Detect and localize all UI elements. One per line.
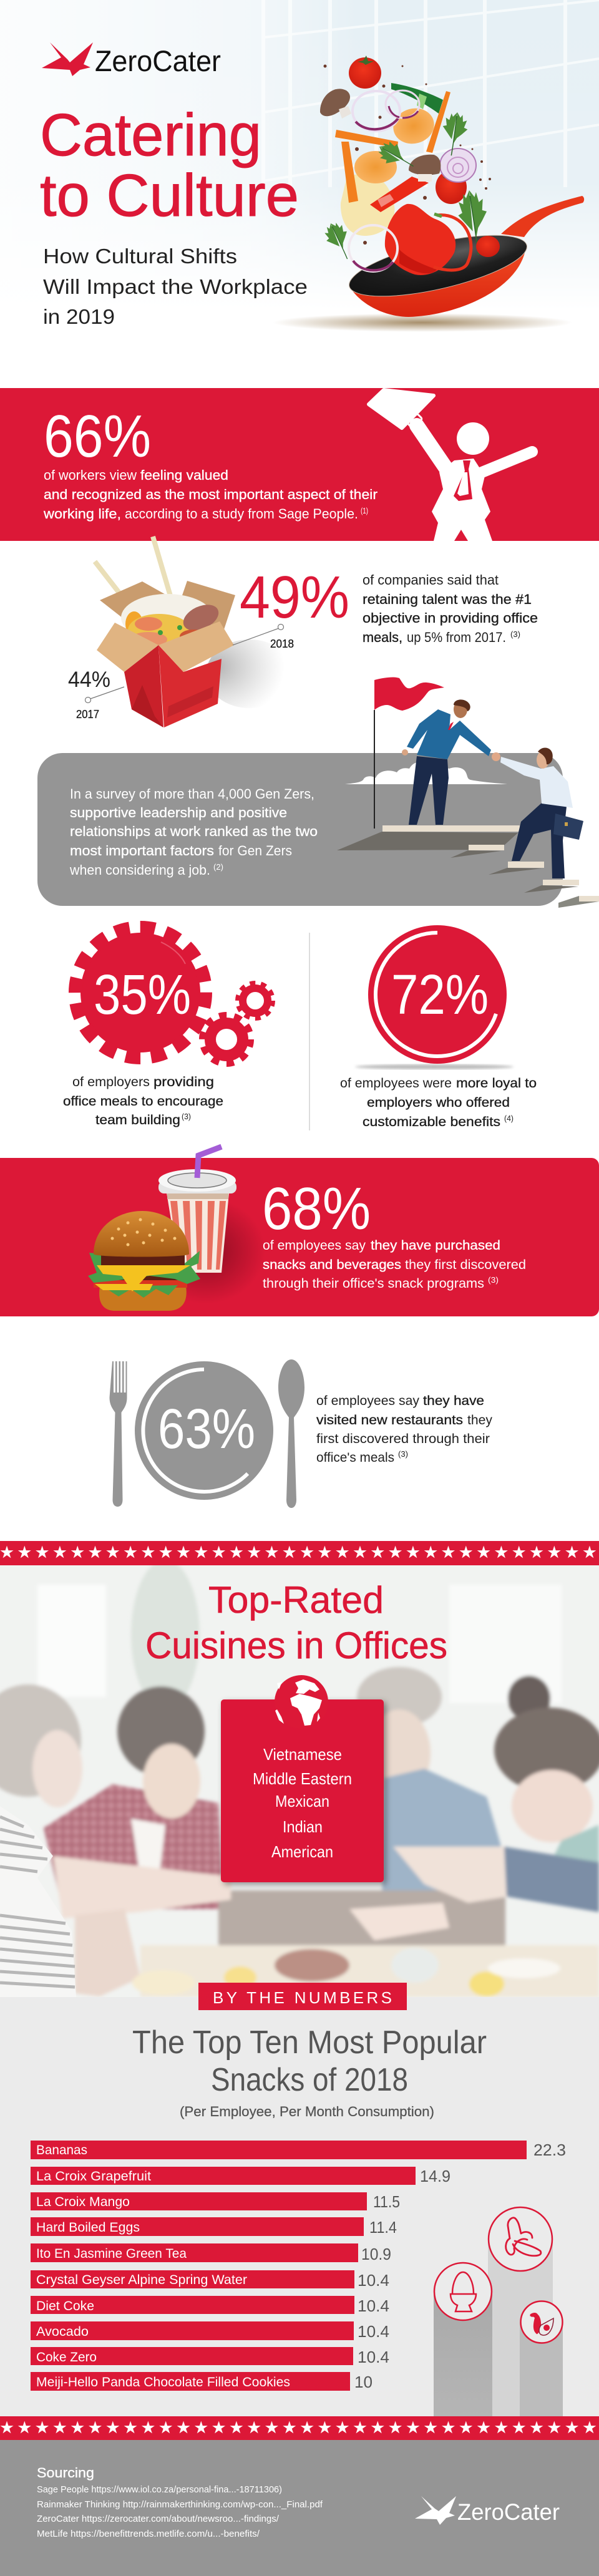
heading: Top-Rated Cuisines — [145, 1579, 447, 1666]
text block — [69, 786, 318, 878]
panel: 66% red banner — [0, 388, 599, 541]
bar: Avocado — [31, 2321, 389, 2341]
text block: retaining talent: objective in providing office — [363, 610, 538, 626]
bar: Diet Coke — [31, 2296, 389, 2315]
text block: new restaurants: (3) — [398, 1449, 408, 1459]
bar: La Croix Grapefruit — [31, 2167, 450, 2185]
text block: new restaurants: of employees say — [316, 1394, 419, 1408]
small gear — [202, 1015, 251, 1064]
bar: Avocado: Avocado — [36, 2325, 89, 2339]
text block: new restaurants: they have — [423, 1394, 484, 1408]
cuisine list: Indian — [283, 1817, 323, 1836]
icon: origami crane — [42, 42, 93, 76]
title: Catering — [40, 102, 261, 168]
text block: (2) — [213, 862, 223, 872]
icon: soda cup — [158, 1147, 236, 1273]
text block: customizable benefits: employers who offered — [367, 1096, 510, 1110]
text block — [43, 467, 377, 522]
panel: footer sourcing — [0, 2440, 599, 2576]
text block: through their office's snack programs — [263, 1276, 484, 1291]
stat: 68%: 68% — [262, 1175, 371, 1242]
cuisine list: Middle Eastern — [253, 1769, 352, 1788]
food — [125, 600, 223, 648]
peppercorns — [323, 65, 491, 245]
bar: Meiji-Hello Panda — [31, 2372, 373, 2391]
text block: when considering a job. — [69, 862, 210, 878]
text block: relationships at work ranked as the two — [70, 824, 318, 839]
bar: Meiji-Hello Panda: 10 — [354, 2373, 373, 2391]
bar: Coke Zero: 10.4 — [358, 2348, 389, 2366]
illustration: vegetables tossed from frying pan — [273, 56, 584, 332]
icon: banana — [489, 2207, 552, 2271]
icon: plate with fork and spoon, 63% — [110, 1359, 304, 1508]
stat: 49% with 2018 marker — [233, 564, 349, 650]
flag — [374, 678, 444, 711]
text block: snacks and beverages — [263, 1258, 401, 1272]
text block: customizable benefits: customizable benefits — [363, 1115, 500, 1129]
decorative columns with icons — [434, 2207, 563, 2416]
text block: (1) — [361, 506, 368, 515]
bar: La Croix Mango: La Croix Mango — [36, 2195, 130, 2209]
icon: avocado — [520, 2301, 563, 2343]
bar: Ito En Jasmine Green Tea: Ito En Jasmine Green Tea — [36, 2247, 187, 2261]
bar: Diet Coke: 10.4 — [358, 2297, 389, 2315]
bar: Bananas — [31, 2141, 566, 2159]
carrots and peppers — [391, 83, 443, 114]
fork — [110, 1361, 127, 1507]
pan handle — [501, 196, 584, 237]
text block: they have purchased — [371, 1238, 500, 1253]
text block: office meals team building — [63, 1075, 223, 1127]
cuisine list — [253, 1745, 352, 1861]
panel: snacks chart background — [0, 1997, 599, 2416]
bar: Coke Zero: Coke Zero — [36, 2350, 97, 2365]
cuisine list: Mexican — [275, 1792, 329, 1810]
bar: Avocado: 10.4 — [358, 2322, 389, 2341]
title — [40, 102, 299, 229]
man in white shirt with briefcase — [492, 748, 583, 878]
star band: upper — [0, 1541, 599, 1565]
bar: Hard Boiled Eggs: 11.4 — [369, 2218, 397, 2237]
tiny gear — [238, 983, 273, 1018]
illustration: handshake on stairs with flag — [337, 678, 599, 908]
text block: customizable benefits: of employees were — [340, 1076, 452, 1091]
bar: La Croix Mango — [31, 2192, 400, 2211]
tomatoes — [349, 57, 381, 89]
text block: office meals team building: providing — [153, 1075, 214, 1089]
title: to Culture — [40, 162, 299, 229]
panel: cuisines card — [221, 1675, 384, 1882]
background: blurred office windows — [0, 0, 599, 337]
text block: retaining talent: retaining talent was the #1 — [363, 591, 532, 607]
potato — [341, 174, 394, 236]
text block: office meals team building: office meals to encourage — [63, 1094, 223, 1109]
text block: new restaurants: they — [467, 1413, 492, 1427]
subtitle: in 2019 — [43, 305, 115, 328]
pan bowl — [351, 246, 526, 317]
icon: businessman with briefcase — [369, 390, 532, 541]
bar: Hard Boiled Eggs: Hard Boiled Eggs — [36, 2220, 140, 2235]
text block: office meals team building: team building — [95, 1113, 180, 1127]
subtitle — [43, 245, 308, 328]
stat: 44% with 2017 marker — [68, 668, 124, 721]
source list: Sage People https://www.iol.co.za/personal-fina...-18711306) — [37, 2484, 282, 2495]
text block: feeling valued — [140, 467, 228, 483]
text block: retaining talent: up 5% from 2017. — [407, 629, 506, 645]
panel: photo background of people dining — [0, 1560, 599, 1997]
bar: Ito En Jasmine Green Tea — [31, 2243, 391, 2263]
source list — [37, 2484, 323, 2539]
star band: lower — [0, 2416, 599, 2440]
subtitle: How Cultural Shifts — [43, 245, 237, 268]
text block: of employees say — [263, 1238, 366, 1253]
striped shirt — [0, 1806, 76, 1997]
bar: Bananas: 22.3 — [533, 2141, 566, 2159]
text block: of workers view — [44, 467, 137, 483]
text block: new restaurants — [316, 1394, 492, 1465]
source list: MetLife https://benefittrends.metlife.com/u...-benefits/ — [37, 2529, 260, 2539]
main gear — [75, 928, 205, 1057]
parsley sprigs — [439, 110, 470, 157]
stat: 49% with 2018 marker: 2018 — [270, 638, 294, 650]
text block: and recognized as the most important aspect of their — [44, 487, 377, 502]
plate — [135, 1361, 273, 1500]
logo: ZeroCater — [42, 42, 221, 77]
heading: top ten snacks: The Top Ten Most Popular — [132, 2024, 487, 2061]
bar: Diet Coke: Diet Coke — [36, 2299, 94, 2313]
badge: by the numbers: BY THE NUMBERS — [213, 1988, 392, 2007]
text block: customizable benefits: (4) — [504, 1114, 514, 1123]
text block: customizable benefits — [340, 1076, 537, 1129]
heading: top ten snacks: (Per Employee, Per Month Consumption) — [180, 2104, 434, 2119]
text block: new restaurants: first discovered through their — [316, 1432, 490, 1446]
stairs — [337, 825, 599, 908]
cloud — [345, 762, 507, 784]
stat: 66%: 66% — [44, 403, 151, 470]
stat: 35% gear graphic: 35% — [94, 964, 191, 1026]
onion rings and mushrooms — [320, 89, 350, 116]
icon: plate with fork and spoon, 63%: 63% — [158, 1398, 255, 1461]
subtitle: Will Impact the Workplace — [43, 275, 308, 298]
heading: Top-Rated Cuisines: Cuisines in Offices — [145, 1625, 447, 1666]
text block: new restaurants: visited new restaurants — [316, 1413, 463, 1427]
stat: 49% with 2018 marker: 49% — [240, 564, 349, 631]
bar: Bananas: Bananas — [36, 2143, 87, 2157]
icon: burger — [88, 1211, 200, 1311]
source list: ZeroCater https://zerocater.com/about/newsroo...-findings/ — [37, 2514, 280, 2524]
text block: new restaurants: office's meals — [316, 1451, 394, 1465]
text block: office meals team building: of employers — [72, 1075, 150, 1089]
bar: Meiji-Hello Panda: Meiji-Hello Panda Chocolate Filled Cookies — [36, 2375, 290, 2389]
text block: retaining talent: meals, — [363, 629, 402, 645]
text block: they first discovered — [405, 1258, 526, 1272]
illustration: takeout box — [95, 537, 293, 727]
heading: top ten snacks — [132, 2024, 487, 2119]
bar: La Croix Grapefruit: 14.9 — [420, 2167, 450, 2185]
bar: Hard Boiled Eggs — [31, 2217, 397, 2237]
panel: Gen Z gray card — [37, 753, 563, 906]
icon: egg in cup — [434, 2263, 492, 2320]
text block: In a survey of more than 4,000 Gen Zers, — [70, 786, 314, 802]
stat: 72% circle: 72% — [391, 964, 489, 1026]
text block: retaining talent: of companies said that — [363, 572, 499, 588]
stat: 44% with 2017 marker: 2017 — [76, 708, 99, 721]
bar: La Croix Mango: 11.5 — [373, 2192, 400, 2211]
stat: 72% circle — [355, 925, 514, 1069]
pan interior — [344, 223, 532, 309]
text block: working life, — [43, 506, 121, 522]
stat: 35% gear graphic — [75, 928, 273, 1064]
text block — [263, 1238, 526, 1291]
heading: top ten snacks: Snacks of 2018 — [211, 2062, 408, 2098]
panel: 68% red banner — [0, 1147, 599, 1316]
heading: sourcing: Sourcing — [37, 2465, 94, 2481]
cuisine list: American — [271, 1842, 333, 1861]
spoon — [278, 1359, 304, 1508]
wordmark: ZeroCater — [95, 44, 221, 77]
stat: 44% with 2017 marker: 44% — [68, 668, 110, 692]
source list: Rainmaker Thinking http://rainmakerthinking.com/wp-con..._Final.pdf — [37, 2499, 323, 2510]
bar: Crystal Geyser Alpine Spring Water: 10.4 — [358, 2271, 389, 2290]
logo: white ZeroCater — [415, 2496, 560, 2525]
bar: Ito En Jasmine Green Tea: 10.9 — [361, 2245, 391, 2263]
text block: (3) — [488, 1275, 499, 1285]
badge: by the numbers — [198, 1983, 407, 2010]
chopsticks — [95, 537, 175, 618]
logo: white ZeroCater: ZeroCater — [457, 2499, 560, 2525]
bar: La Croix Grapefruit: La Croix Grapefruit — [36, 2169, 151, 2184]
text block: according to a study from Sage People. — [125, 506, 358, 522]
bar: Crystal Geyser Alpine Spring Water: Crystal Geyser Alpine Spring Water — [36, 2273, 247, 2287]
text block: supportive leadership and positive — [70, 805, 287, 820]
icon: globe — [275, 1675, 328, 1729]
text block: customizable benefits: more loyal to — [456, 1076, 537, 1091]
bell pepper and lower items — [385, 204, 455, 275]
man in blue suit — [402, 699, 491, 825]
bar: Crystal Geyser Alpine Spring Water — [31, 2270, 389, 2290]
text block: retaining talent: (3) — [510, 629, 520, 639]
text block: retaining talent — [363, 572, 538, 645]
text block: most important factors — [70, 843, 214, 858]
heading: Top-Rated Cuisines: Top-Rated — [208, 1579, 384, 1621]
text block: office meals team building: (3) — [182, 1112, 191, 1121]
cuisine list: Vietnamese — [263, 1745, 342, 1764]
bar: Coke Zero — [31, 2347, 389, 2366]
bar chart: snack consumption — [31, 2141, 566, 2391]
text block: for Gen Zers — [218, 843, 292, 858]
